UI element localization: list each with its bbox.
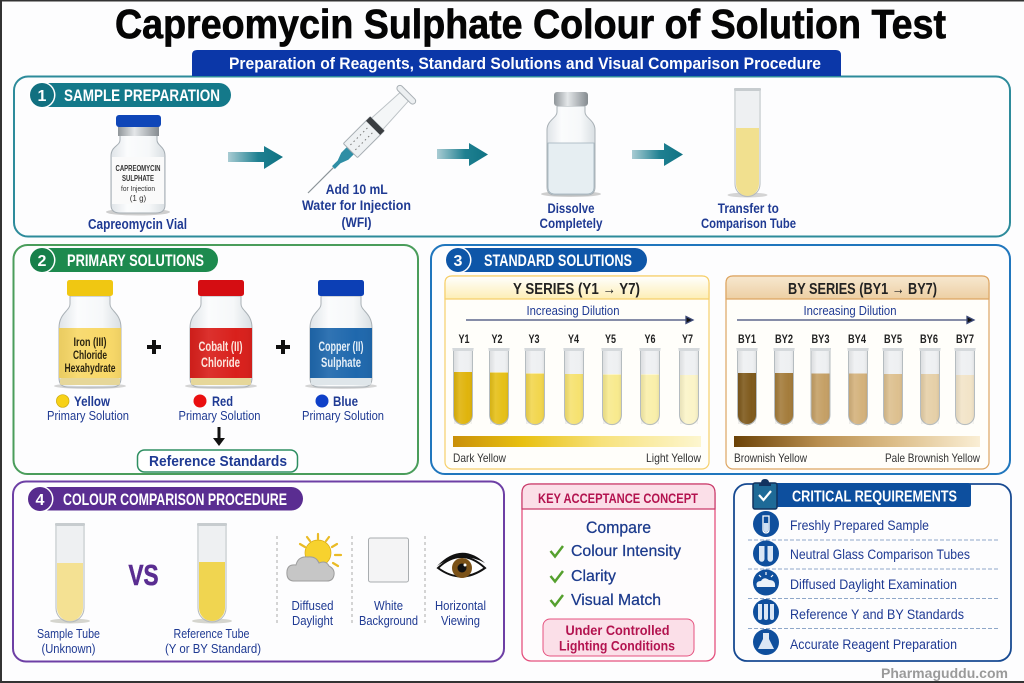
icon: copper sulphate bottle: Copper (II) [318,339,364,354]
chart: Y tubes: Y1 [458,334,470,346]
text: compare: Compare [586,518,651,537]
panel: colour comparison procedure [13,482,504,662]
label: yellow primary solution [47,393,129,423]
heading: colour comparison procedure [26,486,303,512]
chart: Y tubes: Y5 [605,334,616,346]
icon: iron chloride bottle: Iron (III) [74,335,106,349]
chart: Y tubes: Y2 [492,334,502,346]
colour scale: Y series [453,436,701,465]
icon: syringe [300,84,417,201]
panel: standard solutions [431,245,1010,474]
heading: critical requirements: CRITICAL REQUIREMENTS [792,488,957,506]
label: add water for injection: (WFI) [342,214,372,230]
callout: reference standards: Reference Standards [149,453,287,470]
icon: diffused daylight [287,534,341,581]
label: transfer to comparison tube: Comparison Tube [701,216,796,231]
label: blue primary solution [302,393,384,423]
label: blue primary solution: Primary Solution [302,409,384,423]
requirement: neutral glass comparison tubes [753,540,970,566]
chart: Y tubes [452,334,700,425]
icon: eye [437,553,485,578]
icon: copper sulphate bottle: Sulphate [321,355,361,370]
panel: Y series [445,276,709,469]
icon: clipboard [753,479,777,509]
label: increasing dilution: Increasing Dilution [804,303,896,318]
icon: cobalt chloride bottle: Cobalt (II) [198,339,242,354]
heading: BY series: BY SERIES (BY1 → BY7) [788,281,937,298]
requirement: accurate reagent preparation [753,629,957,655]
icon: plus [276,340,290,354]
colour scale: Y series: Dark Yellow [453,451,506,465]
icon: cobalt chloride bottle: Chloride [201,355,240,370]
label: reference tube: Reference Tube [174,627,250,641]
colour scale: BY series: Pale Brownish Yellow [885,451,980,465]
chart: BY tubes: BY4 [848,334,866,346]
label: sample tube: (Unknown) [42,642,96,656]
label: horizontal viewing: Viewing [441,614,480,628]
label: increasing dilution: Increasing Dilution [526,303,620,318]
chart: BY tubes: BY1 [738,334,756,346]
heading: standard solutions: 3 [454,253,463,270]
text: versus: VS [128,560,158,592]
icon: comparison tube [728,88,768,198]
label: transfer to comparison tube [701,201,796,231]
requirement: diffused daylight examination [753,570,957,596]
icon: iron chloride bottle: Hexahydrate [64,361,116,375]
callout: lighting conditions: Lighting Conditions [559,638,675,654]
arrow: vial to tube [632,143,683,166]
heading: standard solutions [444,246,647,274]
icon: plus [147,340,161,354]
checklist item: colour intensity: Colour Intensity [571,543,681,560]
chart: Y tubes: Y7 [682,334,693,346]
label: horizontal viewing [435,599,486,628]
requirement: accurate reagent preparation: Accurate Reagent Preparation [790,637,957,652]
icon: reference tube [192,523,232,624]
icon: capreomycin vial: CAPREOMYCIN [116,164,161,173]
heading: primary solutions: PRIMARY SOLUTIONS [67,252,204,270]
heading: sample preparation: SAMPLE PREPARATION [64,87,220,105]
label: add water for injection [302,181,411,230]
label: white background: Background [359,614,418,628]
icon: white background [368,538,408,582]
subtitle banner: Preparation of Reagents, Standard Solutions and Visual Comparison Procedure [229,54,821,73]
icon: iron chloride bottle: Chloride [73,348,107,362]
panel: sample preparation [14,76,1010,236]
colour scale: Y series: Light Yellow [646,451,701,465]
chart: BY tubes: BY2 [775,334,793,346]
icon: iron chloride bottle [54,280,126,389]
icon: capreomycin vial: SULPHATE [122,174,154,183]
heading: primary solutions: 2 [38,253,47,270]
icon: dissolved vial [541,92,601,197]
icon: copper sulphate bottle [305,280,377,389]
label: sample tube: Sample Tube [37,627,100,641]
chart: Y tubes: Y6 [644,334,656,346]
heading: colour comparison procedure: COLOUR COMPARISON PROCEDURE [63,491,287,509]
label: capreomycin vial: Capreomycin Vial [88,217,187,233]
chart: BY tubes: BY6 [920,334,938,346]
requirement: freshly prepared sample: Freshly Prepared Sample [790,518,929,533]
arrow: increasing dilution [466,316,693,324]
callout: lighting conditions [543,619,694,656]
chart: BY tubes: BY7 [956,334,974,346]
panel: critical requirements [734,479,1011,661]
icon: capreomycin vial [106,115,170,216]
requirement: reference standards: Reference Y and BY Standards [790,607,964,622]
label: reference tube [165,627,261,656]
label: horizontal viewing: Horizontal [435,599,486,613]
panel: primary solutions [14,245,418,474]
label: dissolve completely: Completely [540,216,603,231]
requirement: freshly prepared sample [753,511,929,537]
label: diffused daylight [292,599,334,628]
heading: critical requirements [775,483,971,507]
label: yellow primary solution: Primary Solution [47,409,129,423]
label: diffused daylight: Daylight [292,614,333,628]
icon: capreomycin vial: (1 g) [130,194,147,203]
chart: BY tubes: BY3 [812,334,830,346]
heading: key acceptance concept: KEY ACCEPTANCE CONCEPT [538,491,699,506]
heading: Y series: Y SERIES (Y1 → Y7) [513,281,640,298]
heading: primary solutions [28,246,218,274]
checklist item: clarity [550,568,616,585]
label: red primary solution: Red [212,393,233,409]
label: yellow primary solution: Yellow [74,393,110,409]
label: dissolve completely: Dissolve [548,201,595,216]
label: white background: White [374,599,403,613]
panel: key acceptance concept [522,484,715,661]
label: sample tube [37,627,100,656]
arrow: vial to syringe [228,146,283,169]
icon: cobalt chloride bottle [185,280,257,389]
title: Capreomycin Sulphate Colour of Solution Test [115,1,946,47]
label: transfer to comparison tube: Transfer to [718,201,779,216]
label: add water for injection: Water for Injection [302,197,411,213]
heading: standard solutions: STANDARD SOLUTIONS [484,252,632,270]
icon: capreomycin vial: for Injection [121,184,155,193]
arrow: to reference standards [213,427,225,446]
label: white background [359,599,418,628]
colour scale: BY series [734,436,980,465]
requirement: diffused daylight examination: Diffused Daylight Examination [790,577,957,592]
icon: sample tube [50,523,90,624]
chart: Y tubes: Y4 [568,334,579,346]
subtitle banner [192,50,841,76]
callout: lighting conditions: Under Controlled [566,622,670,638]
label: diffused daylight: Diffused [292,599,334,613]
requirement: neutral glass comparison tubes: Neutral Glass Comparison Tubes [790,547,970,562]
arrow: increasing dilution [737,316,974,324]
checklist item: visual match: Visual Match [571,592,661,609]
heading: sample preparation [28,82,231,108]
chart: BY tubes: BY5 [884,334,902,346]
panel: BY series [726,276,989,469]
heading: sample preparation: 1 [38,88,47,105]
chart: Y tubes: Y3 [528,334,540,346]
label: red primary solution: Primary Solution [178,409,261,423]
watermark: Pharmaguddu.com [881,665,1008,681]
label: add water for injection: Add 10 mL [326,181,388,197]
chart: BY tubes [736,334,976,425]
label: blue primary solution: Blue [333,393,358,409]
label: red primary solution [178,393,261,423]
label: dissolve completely [540,201,603,231]
requirement: reference standards [753,599,964,625]
arrow: syringe to vial [437,143,488,166]
heading: colour comparison procedure: 4 [36,492,45,509]
checklist item: clarity: Clarity [571,568,616,585]
colour scale: BY series: Brownish Yellow [734,451,807,465]
label: reference tube: (Y or BY Standard) [165,642,261,656]
